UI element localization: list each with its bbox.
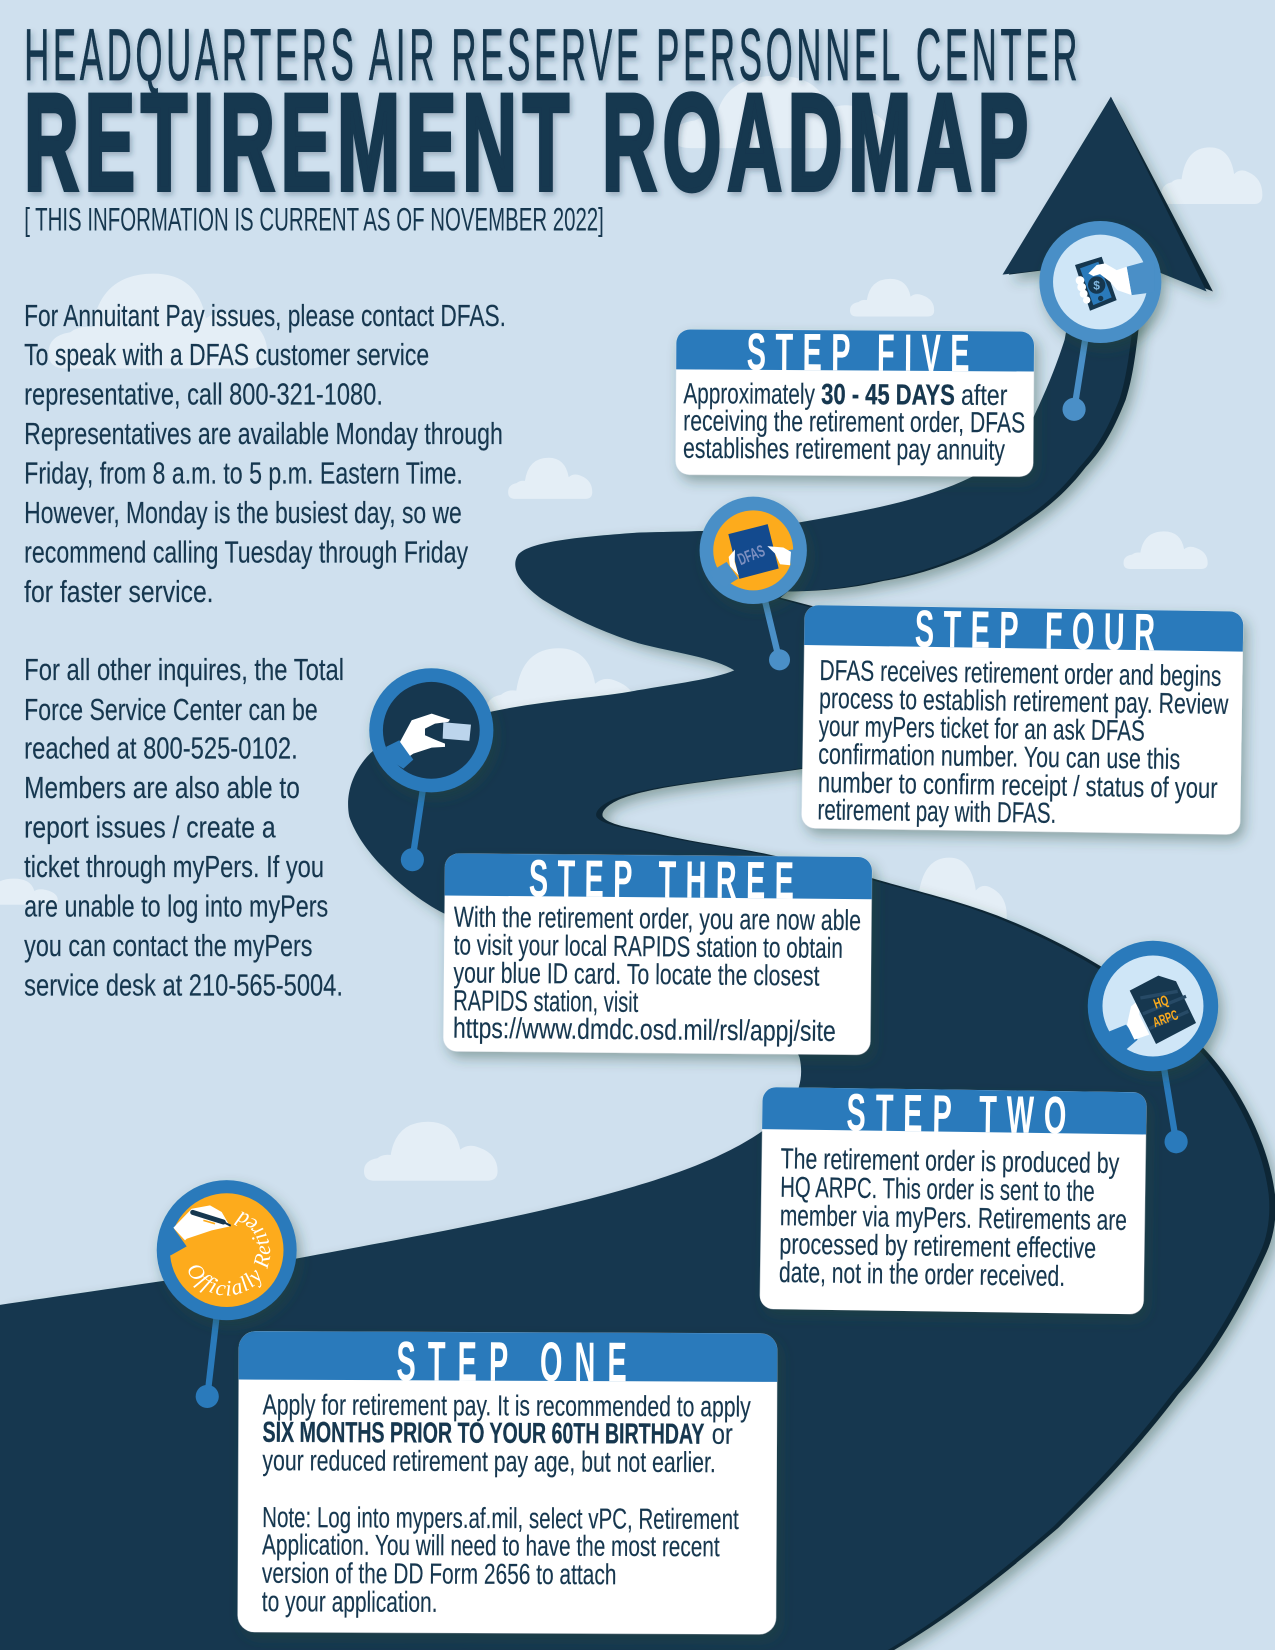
panel: step five: establishes retirement pay annuity: [683, 433, 1005, 467]
marker: step two pin and HQ ARPC document icon: [1088, 941, 1218, 1153]
marker: step one pin and signature icon: [153, 1178, 309, 1408]
panel: step four: STEP FOUR: [914, 600, 1155, 661]
panel: step five: 30 - 45 DAYS: [821, 379, 955, 412]
panel: step three: your blue ID card. To locate the closest: [453, 957, 820, 993]
title: HEADQUARTERS AIR RESERVE PERSONNEL CENTER: [24, 15, 1077, 97]
panel: step three: [443, 848, 872, 1055]
panel: step three: RAPIDS station, visit: [453, 985, 638, 1019]
text block: Total Force Service Center contact: ticket through myPers. If you: [24, 850, 324, 884]
panel: step two: date, not in the order received.: [779, 1257, 1065, 1293]
clouds: [0, 76, 1262, 1181]
text block: Total Force Service Center contact: Force Service Center can be: [24, 693, 318, 727]
text block: Total Force Service Center contact: are unable to log into myPers: [24, 890, 328, 924]
panel: step four: [801, 598, 1243, 835]
marker: step three pin and ID card icon: [369, 668, 493, 871]
title: RETIREMENT ROADMAP: [24, 67, 1028, 219]
icon: hand holding HQ ARPC document: ARPC: [1150, 1006, 1181, 1031]
icon: hands holding DFAS book: [710, 524, 800, 587]
icon: hand holding HQ ARPC document: [1109, 976, 1196, 1050]
icon: hand signing with pen and curved text: Officially Retired: [188, 1211, 270, 1296]
text block: Total Force Service Center contact: you can contact the myPers: [24, 929, 312, 963]
text block: Total Force Service Center contact: report issues / create a: [24, 811, 276, 845]
panel: step two: HQ ARPC. This order is sent to the: [780, 1172, 1095, 1208]
panel: step two: processed by retirement effective: [779, 1229, 1096, 1265]
panel: step three: https://www.dmdc.osd.mil/rsl/appj/site: [453, 1013, 836, 1048]
text block: DFAS contact: To speak with a DFAS customer service: [24, 338, 429, 372]
panel: step one: SIX MONTHS PRIOR TO YOUR 60TH BIRTHDAY: [262, 1417, 704, 1451]
icon: hand holding dollar bill: [1075, 257, 1154, 311]
panel: step one: Note: Log into mypers.af.mil, select vPC, Retirement: [262, 1502, 739, 1536]
icon: hand holding ID card: [386, 714, 471, 769]
text block: DFAS contact: Representatives are available Monday through: [24, 417, 503, 451]
panel: step three: to visit your local RAPIDS station to obtain: [454, 930, 843, 965]
text block: DFAS contact: for faster service.: [24, 575, 214, 609]
panel: step one: your reduced retirement pay age, but not earlier.: [262, 1445, 716, 1479]
text block: DFAS contact: However, Monday is the busiest day, so we: [24, 496, 462, 530]
panel: step two: STEP TWO: [846, 1083, 1067, 1145]
text block: DFAS contact: [24, 299, 506, 609]
panel: step one: Apply for retirement pay. It is recommended to apply: [263, 1389, 751, 1424]
marker: step five pin and money icon: [1039, 221, 1161, 421]
panel: step one: Application. You will need to have the most recent: [262, 1529, 720, 1563]
text block: DFAS contact: recommend calling Tuesday through Friday: [24, 535, 469, 569]
panel: step five: Approximately: [683, 378, 815, 411]
marker: step four pin and DFAS book icon: [700, 497, 807, 670]
icon: hand holding HQ ARPC document: HQ: [1151, 992, 1171, 1012]
icon: hands holding DFAS book: DFAS: [735, 541, 767, 569]
panel: step one: or: [712, 1419, 733, 1451]
panel: step five: receiving the retirement order, DFAS: [683, 405, 1025, 440]
panel: step three: STEP THREE: [529, 849, 794, 910]
panel: step two: [760, 1082, 1147, 1314]
panel: step five: STEP FIVE: [747, 323, 970, 382]
panel: step five: [676, 322, 1034, 477]
panel: step two: member via myPers. Retirements are: [780, 1200, 1127, 1237]
panel: step two: The retirement order is produced by: [780, 1143, 1120, 1180]
text block: Total Force Service Center contact: service desk at 210-565-5004.: [24, 968, 343, 1002]
text block: Total Force Service Center contact: [24, 653, 344, 1002]
text block: Total Force Service Center contact: For all other inquires, the Total: [24, 653, 344, 687]
text block: DFAS contact: representative, call 800-321-1080.: [24, 378, 383, 412]
text block: DFAS contact: For Annuitant Pay issues, please contact DFAS.: [24, 299, 506, 333]
panel: step one: to your application.: [262, 1586, 438, 1619]
icon: hand holding dollar bill: $: [1093, 278, 1100, 292]
panel: step four: your myPers ticket for an ask DFAS: [819, 711, 1145, 748]
panel: step one: version of the DD Form 2656 to attach: [262, 1558, 617, 1591]
panel: step one: STEP ONE: [396, 1331, 627, 1394]
text block: DFAS contact: Friday, from 8 a.m. to 5 p.m. Eastern Time.: [24, 457, 463, 491]
panel: step five: after: [961, 380, 1008, 412]
panel: step four: retirement pay with DFAS.: [817, 794, 1057, 830]
text block: Total Force Service Center contact: reached at 800-525-0102.: [24, 732, 298, 766]
text block: Total Force Service Center contact: Members are also able to: [24, 771, 300, 805]
panel: step one: [237, 1331, 777, 1634]
panel: step three: With the retirement order, you are now able: [454, 902, 861, 937]
currency note: [ THIS INFORMATION IS CURRENT AS OF NOVEMBER 2022]: [24, 200, 604, 237]
